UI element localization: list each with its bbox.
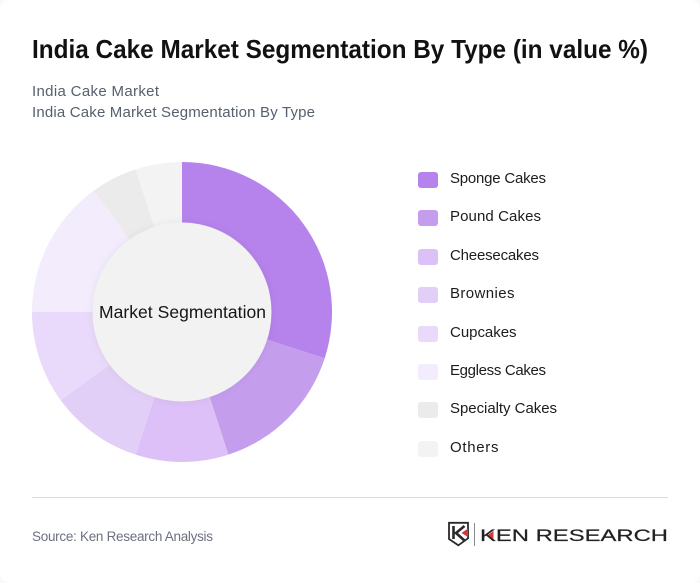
- subtitle line 1: India Cake Market: [32, 83, 160, 100]
- segment: Cupcakes: [32, 312, 182, 400]
- legend item: Cupcakes: Cupcakes: [450, 324, 516, 341]
- donut centre circle: [92, 222, 272, 402]
- donut chart: [32, 162, 332, 462]
- icon: red wedge on wordmark K: [488, 531, 494, 539]
- legend item: Specialty Cakes: Specialty Cakes: [450, 400, 557, 417]
- segment: Pound Cakes: [182, 312, 325, 455]
- legend: [418, 170, 557, 457]
- segment: Eggless Cakes: [32, 191, 182, 312]
- Ken Research logo: [449, 523, 668, 546]
- legend item: Others: Others: [450, 439, 498, 456]
- icon: shield with K: [449, 523, 468, 545]
- legend item: Sponge Cakes: Sponge Cakes: [450, 170, 546, 187]
- source note: Source: Ken Research Analysis: [32, 529, 213, 544]
- legend item: Brownies: [418, 285, 514, 303]
- title: India Cake Market Segmentation By Type (in value %): [32, 34, 648, 64]
- legend item: Pound Cakes: [418, 208, 541, 226]
- segment: Sponge Cakes: [182, 162, 332, 358]
- legend item: Cupcakes: [418, 324, 516, 342]
- logo wordmark: KEN RESEARCH: [480, 527, 668, 545]
- subtitle block: [32, 83, 315, 121]
- segment: Others: [136, 162, 182, 312]
- donut centre label: Market Segmentation: [99, 302, 266, 322]
- subtitle line 2: India Cake Market Segmentation By Type: [32, 104, 315, 121]
- legend item: Eggless Cakes: Eggless Cakes: [450, 362, 546, 379]
- segment: Specialty Cakes: [94, 169, 182, 312]
- legend item: Brownies: Brownies: [450, 285, 514, 302]
- legend item: Others: [418, 439, 498, 457]
- segment: Cheesecakes: [136, 312, 228, 462]
- segment: Brownies: [61, 312, 182, 455]
- legend item: Cheesecakes: Cheesecakes: [450, 247, 539, 264]
- legend item: Cheesecakes: [418, 247, 539, 265]
- legend item: Pound Cakes: Pound Cakes: [450, 208, 541, 225]
